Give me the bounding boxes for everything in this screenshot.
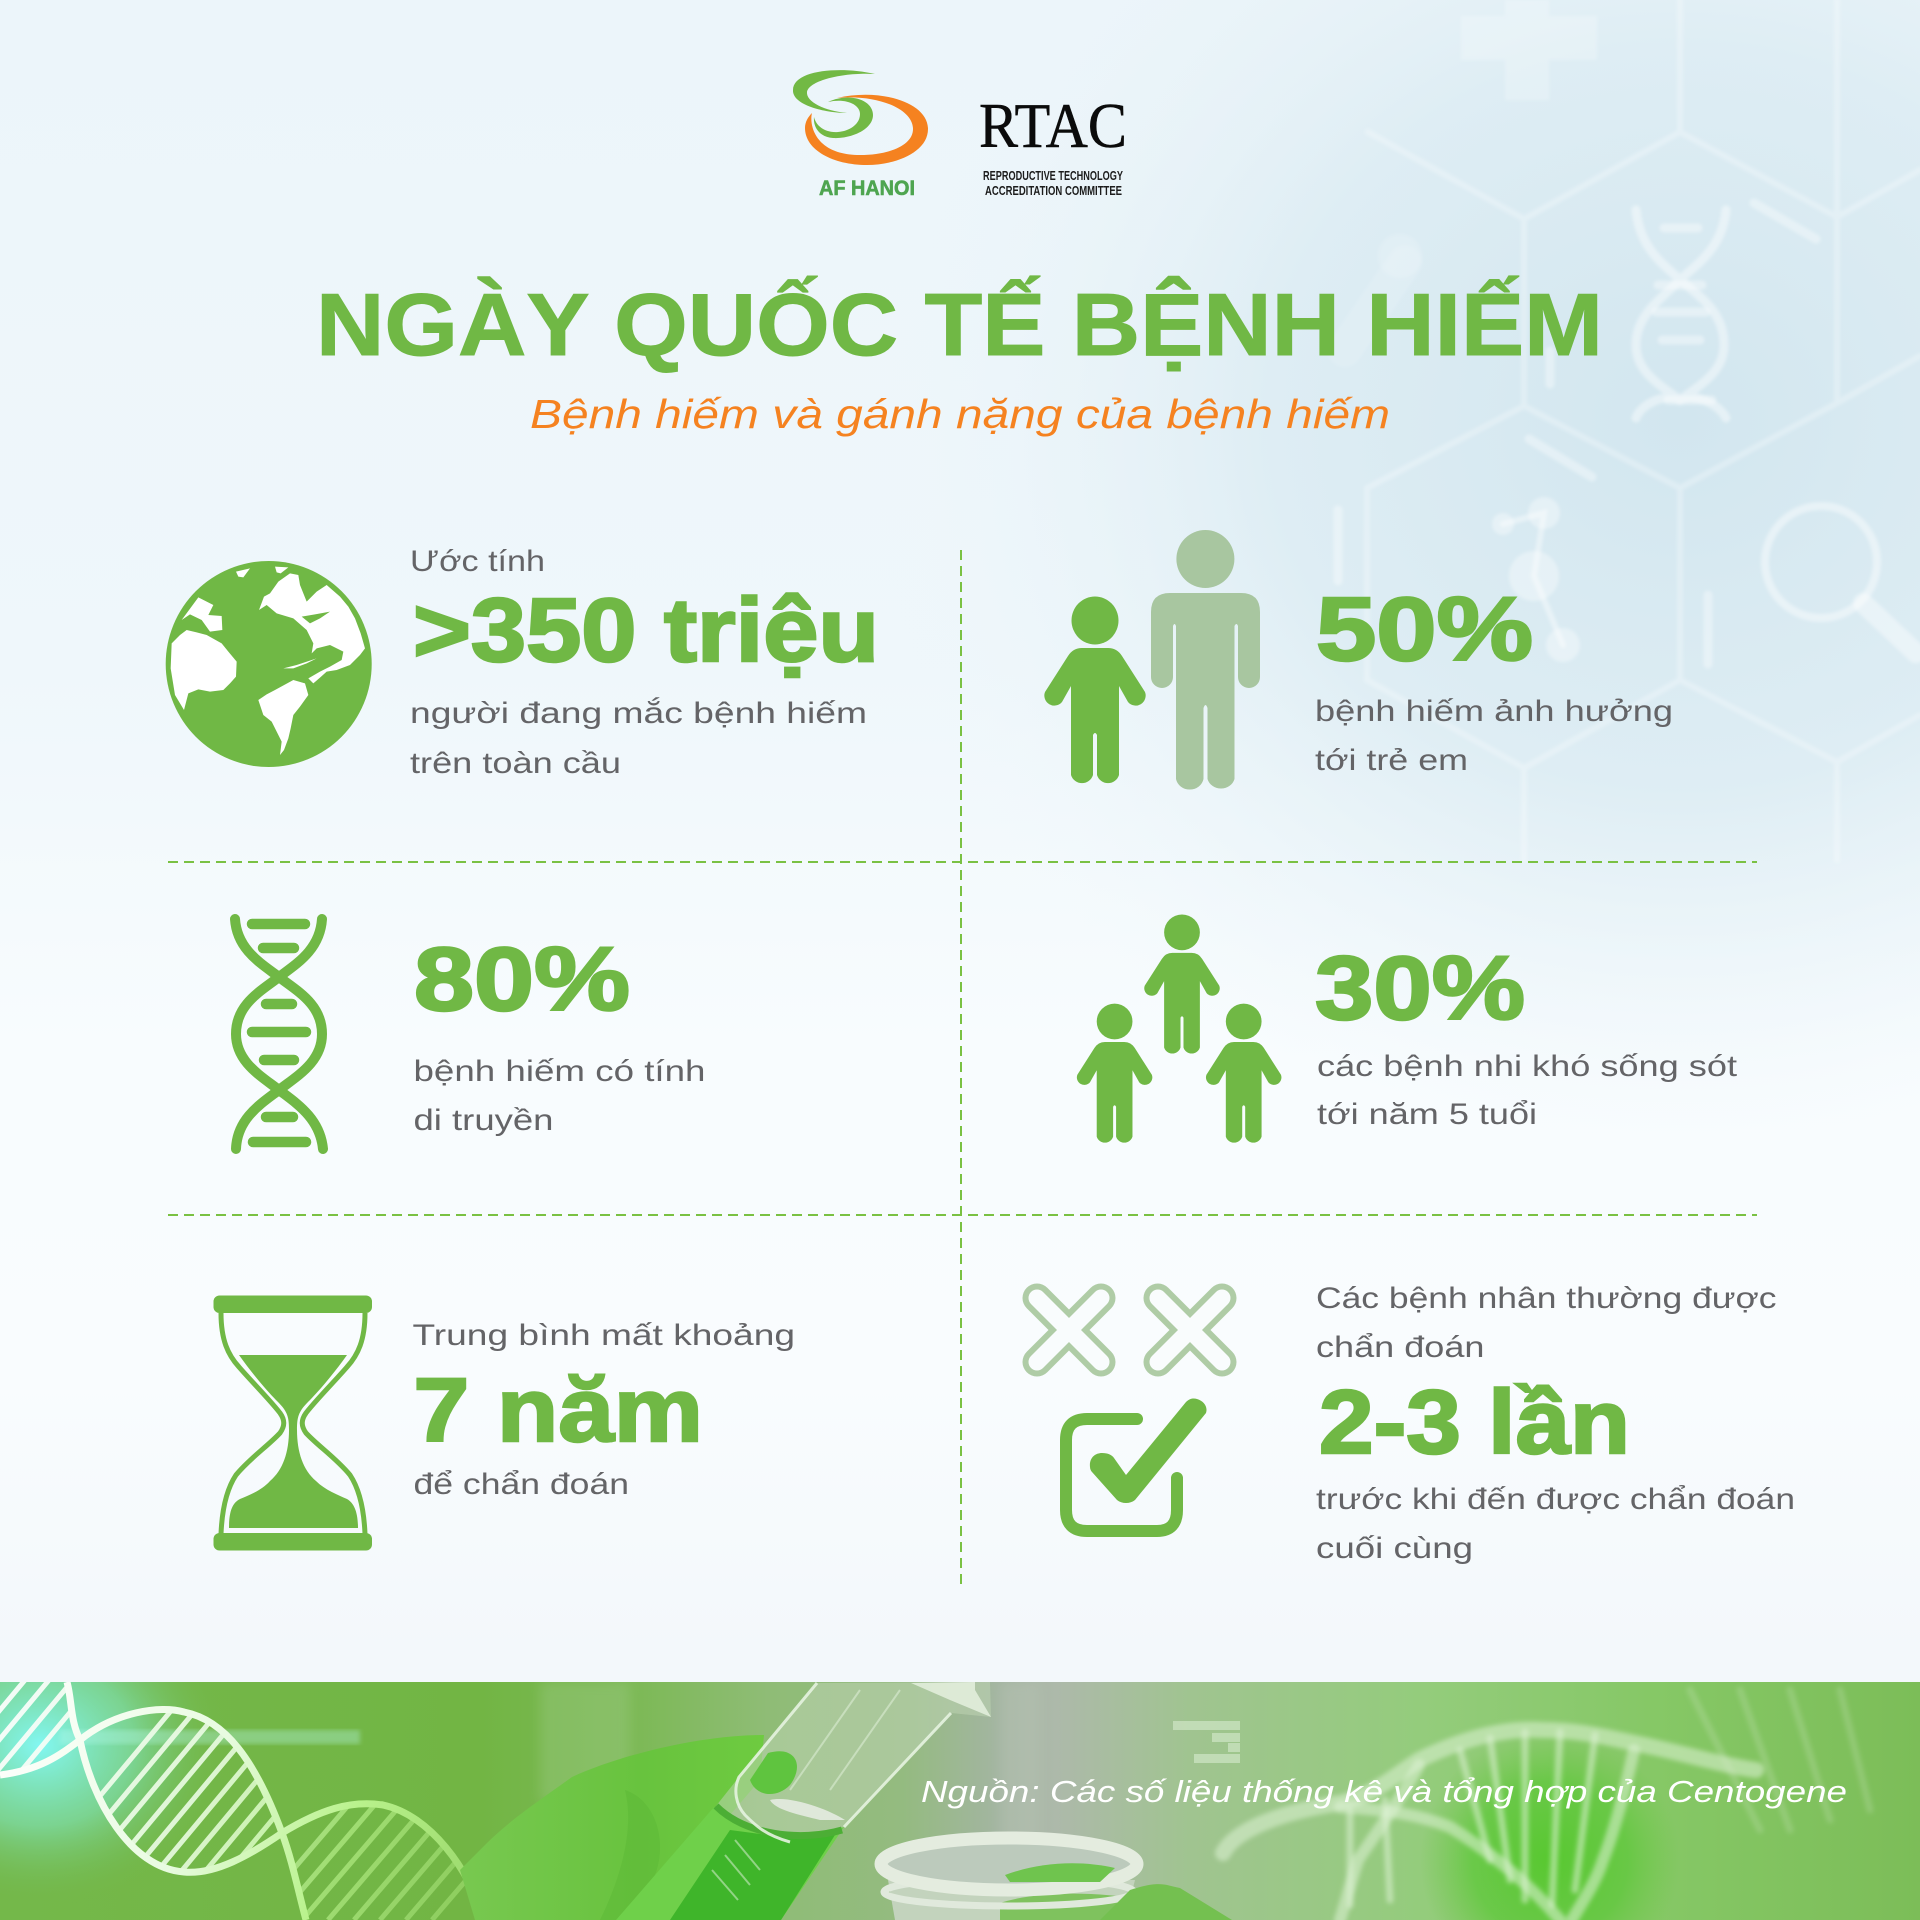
text: description: để chẩn đoán: [414, 1468, 629, 1501]
panel: 2-3 misdiagnoses: [1037, 1282, 1795, 1565]
panel: 350 million people: [166, 545, 879, 780]
test tube: [616, 1682, 991, 1920]
glove: [460, 1735, 764, 1920]
top child: [1144, 914, 1220, 1054]
adult figure: [1151, 530, 1260, 790]
child figure: [1044, 596, 1146, 783]
source note: Nguồn: Các số liệu thống kê và tổng hợp của Centogene: [921, 1774, 1847, 1809]
icon: two crosses: [1037, 1298, 1222, 1362]
footer band: lab imagery: [0, 1682, 1920, 1920]
text: description line 1: bệnh hiếm có tính: [414, 1055, 706, 1088]
icon: DNA helix: [235, 919, 323, 1149]
DNA ribbon left: [0, 1682, 464, 1920]
text: description line 2: di truyền: [414, 1104, 554, 1137]
logo: RTAC: [979, 90, 1127, 198]
stat: 80%: 80%: [414, 930, 630, 1030]
stat: 350 million: >350 triệu: [413, 581, 879, 681]
panel: 7 years to diagnosis: [214, 1296, 795, 1550]
text: estimate label: Ước tính: [410, 545, 545, 578]
lab curtain highlight: [540, 1682, 630, 1802]
right lab graphics: [1173, 1721, 1240, 1763]
icon: three children: [1077, 914, 1281, 1143]
icon: globe: [166, 561, 372, 767]
stat: 7 years: 7 năm: [414, 1361, 703, 1461]
panel: 50 percent children: [1044, 530, 1673, 790]
icon: check box: [1066, 1398, 1207, 1531]
logo: AF Hanoi: [793, 70, 928, 200]
text: description line 1: các bệnh nhi khó sống sót: [1317, 1050, 1738, 1083]
stat: 2-3 times: 2-3 lần: [1319, 1373, 1630, 1473]
logo caption line 2: ACCREDITATION COMMITTEE: [985, 184, 1122, 198]
DNA ribbon right: [1223, 1690, 1870, 1920]
text: description line 1: bệnh hiếm ảnh hưởng: [1315, 695, 1673, 728]
icon: AF Hanoi swirl: [793, 70, 928, 165]
right child: [1206, 1004, 1281, 1143]
text: lead-in: Trung bình mất khoảng: [412, 1319, 795, 1352]
text: description line 2: tới trẻ em: [1315, 744, 1468, 777]
grid dividers: [168, 550, 1757, 1587]
text: lead-in line 2: chẩn đoán: [1316, 1331, 1484, 1364]
text: description line 1: người đang mắc bệnh hiếm: [410, 697, 867, 730]
text: description line 2: cuối cùng: [1316, 1532, 1473, 1565]
panel: 80 percent genetic: [235, 919, 706, 1149]
logo name: AF HANOI: AF HANOI: [819, 177, 915, 200]
text: description line 2: tới năm 5 tuổi: [1317, 1098, 1537, 1131]
title: NGÀY QUỐC TẾ BỆNH HIẾM: [316, 275, 1603, 374]
beaker: [881, 1838, 1232, 1920]
icon: hourglass: [214, 1296, 372, 1550]
text: description line 1: trước khi đến được chẩn đoán: [1316, 1483, 1795, 1516]
logo caption line 1: REPRODUCTIVE TECHNOLOGY: [983, 169, 1123, 183]
background pattern: hexagons and science icons: [1338, 0, 1920, 860]
panel: 30 percent survival: [1077, 914, 1738, 1143]
subtitle: Bệnh hiếm và gánh nặng của bệnh hiếm: [530, 391, 1390, 437]
icon: child and adult: [1044, 530, 1260, 790]
text: description line 2: trên toàn cầu: [410, 747, 621, 780]
logo name: RTAC: RTAC: [979, 90, 1127, 161]
left child: [1077, 1004, 1152, 1143]
text: lead-in line 1: Các bệnh nhân thường được: [1316, 1282, 1776, 1315]
stat: 30%: 30%: [1315, 939, 1525, 1039]
stat: 50%: 50%: [1316, 580, 1533, 680]
